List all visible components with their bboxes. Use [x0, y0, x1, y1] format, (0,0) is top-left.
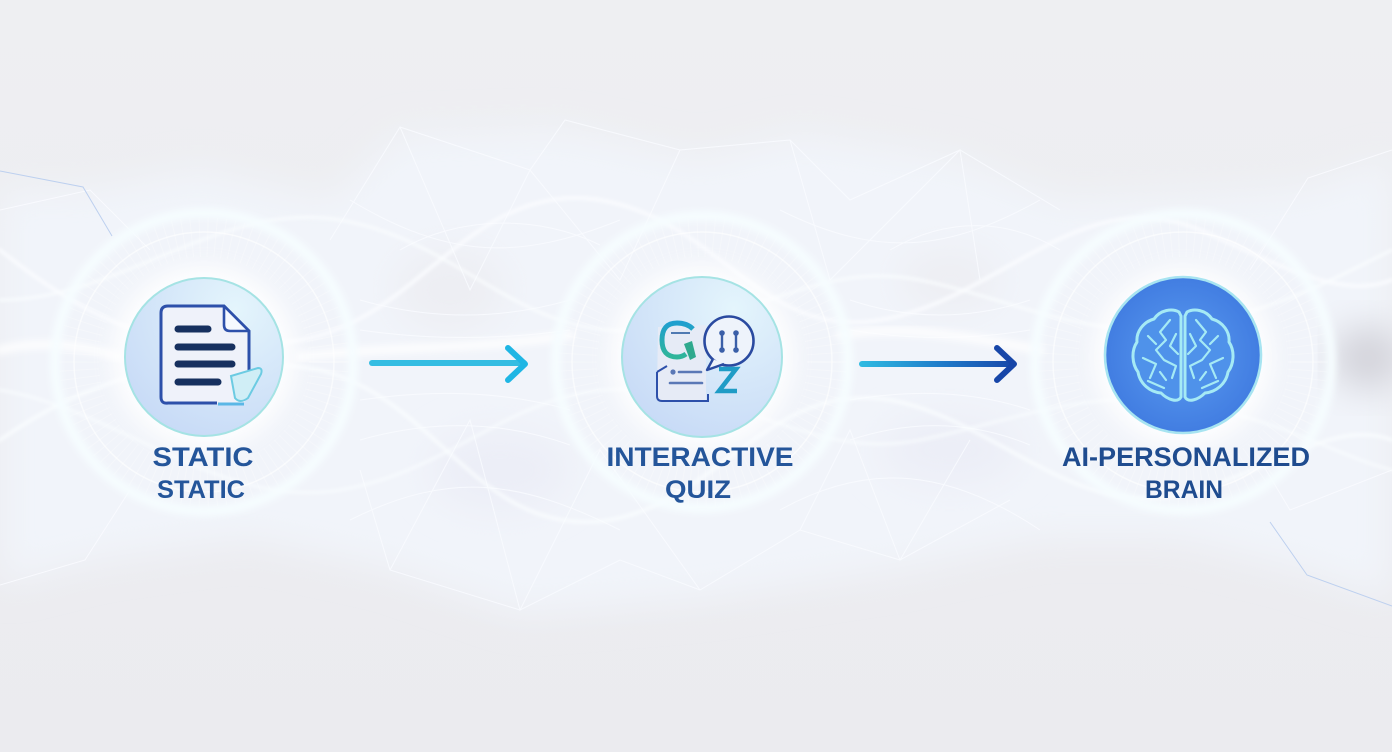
label: interactive quiz: QUIZ — [665, 476, 731, 504]
arrow: quiz to brain — [862, 348, 1014, 380]
label: static — [152, 442, 254, 504]
label: ai-personalized brain: BRAIN — [1145, 476, 1223, 504]
step 1: static — [125, 278, 283, 504]
glowing network band — [0, 120, 1392, 615]
label: static: STATIC — [157, 476, 245, 504]
label: ai-personalized brain: AI-PERSONALIZED — [1062, 442, 1310, 472]
label: interactive quiz: INTERACTIVE — [606, 442, 794, 472]
circle: quiz — [622, 277, 782, 437]
halo rings around steps — [55, 213, 1331, 511]
arrow: static to quiz — [372, 348, 525, 380]
corner accent lines — [0, 171, 1392, 606]
circle: brain — [1105, 277, 1261, 433]
icon: document — [161, 306, 262, 404]
white flowing waves — [0, 198, 1392, 522]
central white glow streak — [0, 331, 1040, 357]
circle: static — [125, 278, 283, 436]
step 2: interactive quiz — [606, 277, 794, 504]
label: interactive quiz — [606, 442, 794, 504]
thin mesh lines — [0, 120, 1392, 610]
label: static: STATIC — [152, 442, 254, 472]
radial spokes around steps — [79, 237, 1308, 487]
icon: brain — [1133, 310, 1233, 400]
icon: quiz sheet and speech bubble — [657, 316, 754, 401]
label: ai-personalized brain — [1062, 442, 1310, 504]
step 3: ai-personalized brain — [1062, 277, 1310, 504]
